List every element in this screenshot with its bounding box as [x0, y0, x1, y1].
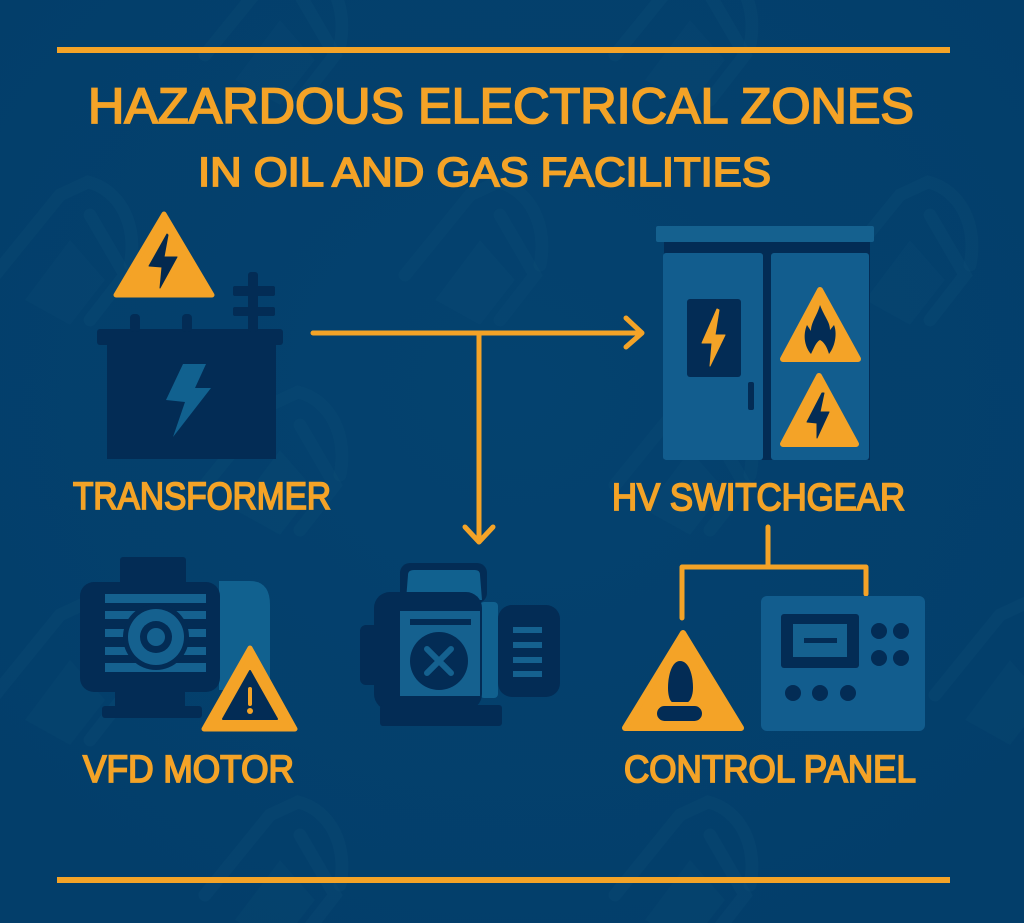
icon: control panel: [761, 596, 925, 731]
label: transformer: TRANSFORMER: [73, 476, 331, 518]
icon: caution warning: [204, 648, 295, 729]
bottom rule: [57, 877, 950, 883]
icon: switchgear cabinet: [656, 226, 874, 460]
icon: transformer bolt: [166, 364, 211, 437]
label: HV switchgear: HV SWITCHGEAR: [612, 477, 905, 519]
subtitle: IN OIL AND GAS FACILITIES: [198, 149, 771, 195]
icon: electrical warning: [783, 376, 856, 444]
connector: switchgear to control panel: [682, 527, 866, 618]
icon: VFD motor: [80, 557, 270, 718]
label: control panel: CONTROL PANEL: [624, 749, 916, 791]
control panel group: [624, 596, 925, 791]
flow arrows: [313, 318, 642, 542]
transformer group: [73, 214, 331, 518]
VFD motor group: [80, 557, 295, 791]
icon: transformer: [97, 272, 283, 459]
switchgear group: [612, 226, 905, 519]
label: VFD motor: VFD MOTOR: [83, 749, 294, 791]
icon: high voltage warning: [116, 214, 212, 295]
top rule: [57, 47, 950, 53]
title: HAZARDOUS ELECTRICAL ZONES: [88, 78, 914, 134]
icon: personnel warning: [625, 633, 741, 728]
icon: pump motor: [360, 563, 560, 726]
icon: fire warning: [783, 290, 858, 359]
